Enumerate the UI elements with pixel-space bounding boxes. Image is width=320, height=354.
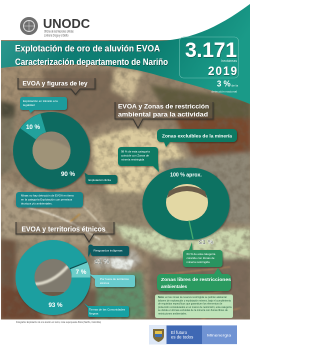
- title: [15, 44, 169, 67]
- callout: tránsito a la legalidad: Explotación en tránsito a la: [23, 99, 58, 103]
- note panel: de requisitos específicos que garanticen los elementos de: [158, 303, 223, 306]
- callout: explotación ilícita: [84, 172, 118, 184]
- government logo strip: El futuro: [171, 330, 187, 335]
- stat panel: hectares: detección nacional: [211, 90, 237, 94]
- callout: explotación ilícita: Explotación ilícita: [88, 178, 111, 182]
- callout: 98 % coincide: [118, 147, 159, 172]
- heading: EVOA y figuras de ley: EVOA y figuras de ley: [22, 80, 88, 88]
- callout: nota minas: Minas no hay detección de EVOA en tierra: [21, 194, 74, 198]
- donut hole photo detail: [34, 259, 72, 298]
- stat panel: hectares: 3.171: [185, 39, 237, 62]
- note panel: se divide en Zonas excluidas de la minería con Zonas libres de: [158, 309, 228, 312]
- donut chart: territorios étnicos: 7 %: [76, 269, 87, 276]
- donut chart: zonas excluibles: 100 % aprox.: [170, 172, 202, 178]
- callout: fuera de territorios: Por fuera de territorios: [100, 277, 129, 281]
- callout: comunidades negras: [84, 303, 129, 317]
- photo grain: [1, 40, 251, 320]
- logo: UNODC: [20, 16, 91, 38]
- heading: EVOA y Zonas de restricción: EVOA y Zonas de restricción: [118, 104, 209, 110]
- note panel: [155, 294, 233, 318]
- heading: EVOA y Zonas de restricción: ambiental para la actividad: [118, 112, 208, 118]
- note panel: restricciones ambientales.: [158, 312, 187, 316]
- label: menos de 1 %: ≤1 %: [199, 239, 214, 246]
- title: Explotación de oro de aluvión EVOA: [15, 44, 161, 54]
- donut chart: figuras de ley: 10 %: [26, 124, 41, 131]
- callout: zonas libres: [157, 268, 232, 291]
- callout: resguardos indígenas: [88, 245, 129, 257]
- background photo: alluvial mining landscape: [0, 40, 251, 320]
- callout: tránsito a la legalidad: [20, 97, 67, 113]
- note panel: labores de exploración y explotación minera, bajo el cumplimiento: [158, 299, 232, 302]
- callout: zonas libres: ambientales: [161, 284, 188, 289]
- donut chart: zonas excluibles: [142, 168, 230, 240]
- callout: 98 % coincide: minería restringida: [121, 158, 145, 162]
- government logo strip: es de todos: [171, 335, 193, 340]
- callout: nota minas: en la categoría Explotación con permisos: [21, 197, 73, 201]
- callout: 64 % coincide: 64 % de esta categoría: [186, 252, 215, 256]
- donut chart: figuras de ley: [13, 112, 90, 189]
- donut hole photo detail: [32, 131, 72, 170]
- callout: zonas excluibles: [157, 129, 237, 147]
- callout: 64 % coincide: minería restringida: [186, 260, 210, 264]
- icon: UN emblem: [20, 17, 38, 35]
- donut chart: territorios étnicos: [16, 240, 91, 315]
- government logo strip: Minenergía: [207, 334, 232, 338]
- header band: [1, 4, 250, 104]
- heading: EVOA y territorios étnicos: [16, 222, 114, 242]
- note panel: protección considerados en el marco de restricción; esta categoría: [158, 306, 232, 309]
- donut chart: figuras de ley: 90 %: [61, 171, 76, 178]
- icon: coat of arms: [153, 329, 164, 342]
- source note: Fotografía: Explotación de oro aluvión en tierra; zona superpuesta Parte (Nariño, Colombia): [16, 320, 101, 324]
- title: Caracterización departamento de Nariño: [15, 57, 169, 67]
- callout: zonas libres: Zonas libres de restricciones: [161, 277, 232, 282]
- logo subtitle: Oficina de las Naciones Unidas: [44, 30, 88, 34]
- stat panel: hectares: 2019: [208, 66, 237, 78]
- callout: zonas excluibles: Zonas excluibles de la minería: [162, 134, 233, 138]
- stat panel: hectares: [180, 37, 238, 94]
- strip at right edge: [250, 0, 251, 60]
- callout: fuera de territorios: [89, 274, 135, 287]
- callout: fuera de territorios: étnicos: [100, 281, 110, 285]
- callout: tránsito a la legalidad: legalidad: [23, 103, 35, 107]
- heading: EVOA y Zonas de restricción: [115, 102, 213, 128]
- donut chart: territorios étnicos: 93 %: [48, 302, 63, 309]
- callout: 64 % coincide: [183, 242, 222, 267]
- callout: comunidades negras: Negras: [89, 312, 99, 316]
- callout: 98 % coincide: 98 % de esta categoría: [121, 150, 150, 154]
- callout: 98 % coincide: coincide con Zonas de: [121, 154, 149, 158]
- logo wordmark: UNODC: [43, 16, 91, 31]
- donut center: sand pool: [166, 184, 208, 221]
- callout: comunidades negras: Tierras de las Comunidades: [89, 308, 125, 312]
- heading: EVOA y territorios étnicos: EVOA y territorios étnicos: [22, 224, 106, 234]
- callout: 64 % coincide: coincide con Zonas de: [186, 256, 215, 260]
- stat panel: hectares: hectáreas: [221, 59, 237, 63]
- callout: resguardos indígenas: Resguardos indígenas: [94, 248, 123, 252]
- label: menos de 1 % étnicos: ≤1 %: [95, 258, 110, 266]
- heading: EVOA y figuras de ley: [18, 78, 95, 94]
- note panel: Nota: en las zonas de reserva restringida se podrán adelantar: [158, 296, 227, 299]
- callout: nota minas: técnicos y/o ambientales.: [21, 201, 53, 205]
- logo subtitle: contra la Droga y el Delito: [44, 34, 69, 38]
- government logo strip: [149, 325, 237, 344]
- stat panel: hectares: 3 % de la: [217, 80, 238, 88]
- callout: nota minas: [16, 192, 83, 208]
